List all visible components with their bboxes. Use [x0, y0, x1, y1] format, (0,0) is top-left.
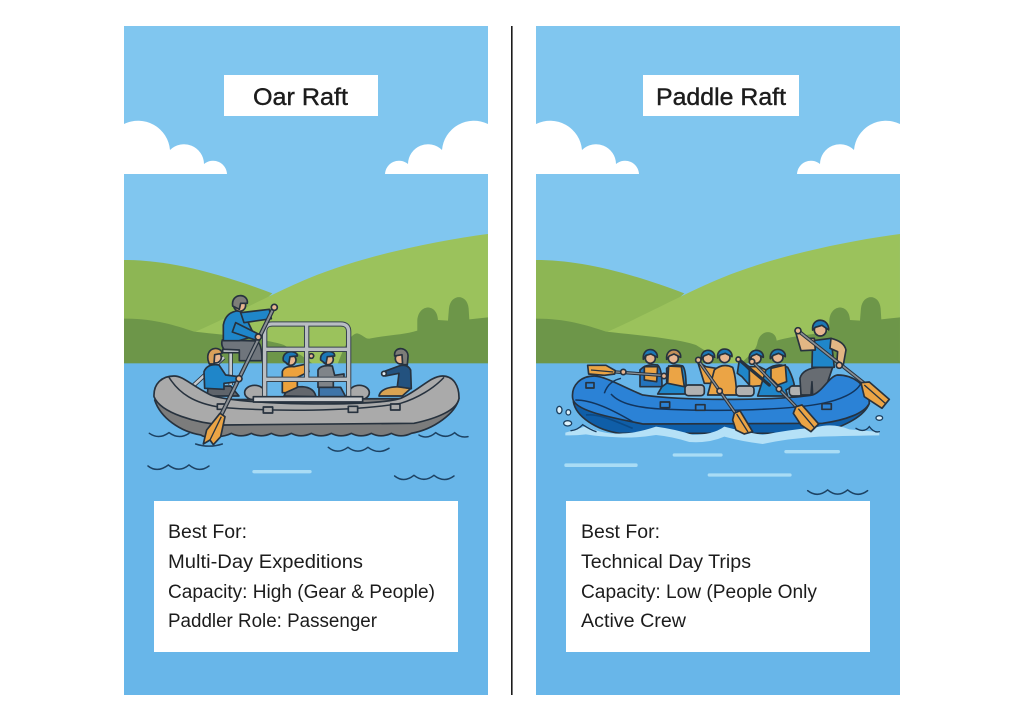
sky	[124, 26, 488, 317]
paddle: crew 2	[736, 357, 819, 432]
water ripple	[808, 490, 868, 494]
paddle: crew 1	[696, 357, 753, 434]
panel: paddle raft	[536, 26, 900, 695]
raft hull	[154, 376, 459, 437]
water highlights	[564, 450, 840, 477]
person: stern passenger	[379, 349, 411, 396]
person: mid crew 1	[698, 350, 716, 383]
person: standing rower	[222, 296, 271, 361]
text block: oar raft details	[154, 501, 458, 652]
water	[124, 363, 488, 695]
text block: paddle raft details: Technical Day Trips	[581, 552, 751, 573]
text block: oar raft details: Best For:	[168, 522, 247, 543]
seat bags	[685, 385, 803, 396]
text block: paddle raft details	[566, 501, 870, 652]
person: rear crew 2	[758, 349, 794, 396]
water ripples	[148, 433, 468, 479]
person: guide standing	[796, 320, 846, 395]
hills	[536, 234, 900, 366]
splashes	[557, 406, 883, 426]
panel: oar raft	[124, 26, 488, 695]
title: oar raft	[224, 75, 378, 116]
person: bow passenger tan helmet	[204, 348, 239, 396]
metal frame	[265, 324, 349, 398]
person: front crew 1	[640, 350, 662, 387]
oar raft illustration	[148, 296, 468, 479]
clouds	[536, 121, 900, 174]
title: oar raft: Oar Raft	[253, 84, 348, 111]
raft hull	[572, 375, 869, 433]
title: paddle raft	[643, 75, 799, 116]
clouds	[124, 121, 488, 174]
text block: oar raft details: Multi-Day Expeditions	[168, 552, 363, 573]
person: orange passenger	[282, 352, 316, 397]
paddle raft illustration	[557, 320, 889, 494]
hills	[124, 234, 488, 366]
text block: paddle raft details: Capacity: Low (People Only	[581, 582, 817, 603]
text block: paddle raft details: Best For:	[581, 522, 660, 543]
oar	[203, 304, 277, 445]
title: paddle raft: Paddle Raft	[656, 84, 786, 111]
person: rear crew 1	[737, 350, 768, 387]
water	[536, 363, 900, 695]
wave lines	[571, 425, 879, 432]
divider line	[511, 26, 513, 695]
paddle: guide	[795, 328, 889, 408]
text block: oar raft details: Paddler Role: Passenger	[168, 611, 378, 632]
text block: paddle raft details: Active Crew	[581, 611, 686, 632]
person: grey vest passenger	[318, 351, 346, 397]
paddle: left side	[588, 365, 667, 379]
foam	[565, 425, 879, 444]
person: front crew 2	[658, 350, 686, 394]
person: mid crew 2	[708, 349, 737, 395]
rower seat frame	[194, 349, 241, 385]
text block: oar raft details: Capacity: High (Gear & People)	[168, 582, 435, 603]
sky	[536, 26, 900, 317]
water highlight	[252, 470, 312, 473]
gear bags	[245, 385, 369, 400]
